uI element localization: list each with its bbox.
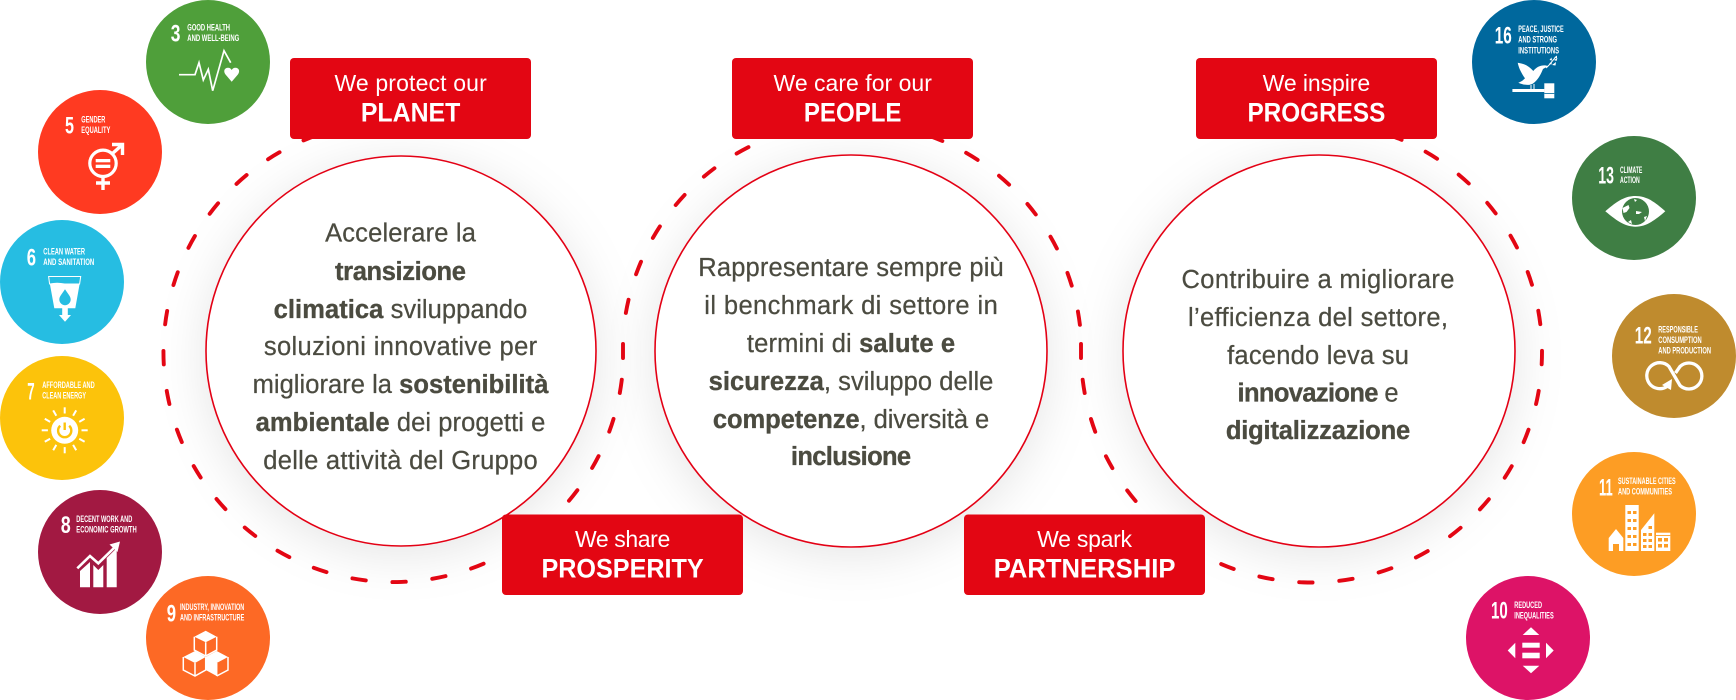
icon: SDG 11 sustainable cities: SUSTAINABLE CITIES	[1618, 476, 1676, 486]
text: planet description: climatica sviluppando	[274, 296, 527, 324]
text: progress description	[1182, 266, 1454, 445]
icon: SDG 16 peace and justice: 16	[1495, 22, 1512, 49]
icon: SDG 10 reduced inequalities: REDUCED	[1514, 600, 1542, 610]
label: we inspire progress	[1196, 58, 1437, 139]
icon: SDG 6 clean water: CLEAN WATER	[43, 246, 85, 256]
icon: SDG 5 gender equality	[38, 90, 162, 214]
icon: SDG 10 reduced inequalities: 10	[1491, 598, 1508, 625]
icon: SDG 16 peace and justice: INSTITUTIONS	[1518, 45, 1559, 55]
label: we care for our people: We care for our	[774, 70, 932, 96]
icon: SDG 7 clean energy: CLEAN ENERGY	[42, 391, 86, 401]
icon: SDG 16 peace and justice	[1472, 0, 1596, 124]
icon: SDG 13 climate action	[1572, 136, 1696, 260]
panel: progress circle	[1123, 155, 1515, 547]
icon: SDG 13 climate action: 13	[1598, 162, 1614, 189]
icon: SDG 11 sustainable cities: AND COMMUNITIES	[1618, 487, 1672, 497]
label: we inspire progress: We inspire	[1263, 70, 1370, 96]
text: people description: sicurezza, sviluppo delle	[709, 368, 993, 396]
text: planet description: ambientale dei progetti e	[256, 409, 545, 437]
label: we spark partnership: PARTNERSHIP	[994, 554, 1176, 584]
icon: SDG 6 clean water: 6	[27, 244, 36, 271]
label: we share prosperity: PROSPERITY	[541, 554, 704, 584]
icon: SDG 5 gender equality: 5	[65, 112, 74, 139]
icon: SDG 8 decent work: ECONOMIC GROWTH	[76, 525, 137, 535]
icon: SDG 13 climate action: CLIMATE	[1620, 165, 1642, 175]
icon: SDG 16 peace and justice: AND STRONG	[1518, 35, 1557, 45]
label: we spark partnership	[964, 514, 1205, 595]
text: progress description: digitalizzazione	[1226, 417, 1410, 445]
panel: people circle	[655, 155, 1047, 547]
text: progress description: Contribuire a migliorare	[1182, 266, 1454, 294]
icon: SDG 3 good health	[146, 0, 270, 124]
label: we care for our people	[732, 58, 973, 139]
icon: SDG 8 decent work	[38, 490, 162, 614]
icon: SDG 12 responsible consumption	[1612, 294, 1736, 418]
text: planet description: migliorare la sostenibilità	[253, 371, 549, 399]
icon: SDG 11 sustainable cities: 11	[1599, 474, 1613, 501]
icon: SDG 12 responsible consumption: RESPONSIBLE	[1658, 324, 1698, 334]
icon: SDG 9 industry: INDUSTRY, INNOVATION	[180, 602, 244, 612]
icon: SDG 10 reduced inequalities: INEQUALITIES	[1514, 611, 1554, 621]
icon: SDG 9 industry: AND INFRASTRUCTURE	[180, 613, 244, 623]
icon: SDG 3 good health: GOOD HEALTH	[187, 22, 230, 32]
icon: SDG 3 good health: AND WELL-BEING	[187, 33, 239, 43]
text: planet description: soluzioni innovative per	[264, 333, 538, 361]
label: we share prosperity: We share	[575, 526, 670, 552]
icon: SDG 5 gender equality: EQUALITY	[81, 125, 111, 135]
icon: SDG 10 reduced inequalities	[1466, 576, 1590, 700]
icon: SDG 7 clean energy: AFFORDABLE AND	[42, 380, 95, 390]
icon: SDG 12 responsible consumption: CONSUMPTION	[1658, 335, 1702, 345]
text: progress description: innovazione e	[1238, 380, 1398, 408]
text: progress description: l’efficienza del settore,	[1188, 304, 1448, 332]
icon: SDG 7 clean energy	[0, 356, 124, 480]
text: people description: Rappresentare sempre più	[698, 254, 1004, 282]
icon: SDG 8 decent work: DECENT WORK AND	[76, 514, 132, 524]
icon: SDG 9 industry	[146, 576, 270, 700]
icon: SDG 16 peace and justice: PEACE, JUSTICE	[1518, 24, 1564, 34]
label: we protect our planet	[290, 58, 531, 139]
label: we spark partnership: We spark	[1037, 526, 1133, 552]
text: people description: termini di salute e	[747, 330, 955, 358]
text: planet description: transizione	[335, 258, 466, 286]
icon: SDG 6 clean water: AND SANITATION	[43, 257, 94, 267]
label: we care for our people: PEOPLE	[804, 98, 902, 128]
label: we share prosperity	[502, 514, 743, 595]
icon: SDG 5 gender equality: GENDER	[81, 114, 105, 124]
text: progress description: facendo leva su	[1227, 342, 1409, 370]
dashed wave ring	[163, 122, 1542, 583]
icon: SDG 7 clean energy: 7	[27, 378, 35, 405]
icon: SDG 13 climate action: ACTION	[1620, 175, 1640, 185]
label: we inspire progress: PROGRESS	[1247, 98, 1385, 128]
text: people description: competenze, diversità e	[713, 406, 989, 434]
text: planet description: delle attività del Gruppo	[263, 447, 538, 475]
text: planet description	[253, 220, 549, 475]
text: people description	[698, 254, 1004, 471]
text: planet description: Accelerare la	[325, 220, 477, 248]
icon: SDG 11 sustainable cities	[1572, 452, 1696, 576]
text: people description: inclusione	[791, 443, 911, 471]
text: people description: il benchmark di settore in	[704, 292, 998, 320]
panel: planet circle	[206, 156, 596, 546]
icon: SDG 8 decent work: 8	[61, 512, 71, 539]
icon: SDG 12 responsible consumption: 12	[1635, 322, 1652, 349]
icon: SDG 3 good health: 3	[171, 20, 180, 47]
label: we protect our planet: PLANET	[361, 98, 460, 128]
icon: SDG 9 industry: 9	[167, 600, 176, 627]
label: we protect our planet: We protect our	[334, 70, 487, 96]
icon: SDG 6 clean water	[0, 220, 124, 344]
